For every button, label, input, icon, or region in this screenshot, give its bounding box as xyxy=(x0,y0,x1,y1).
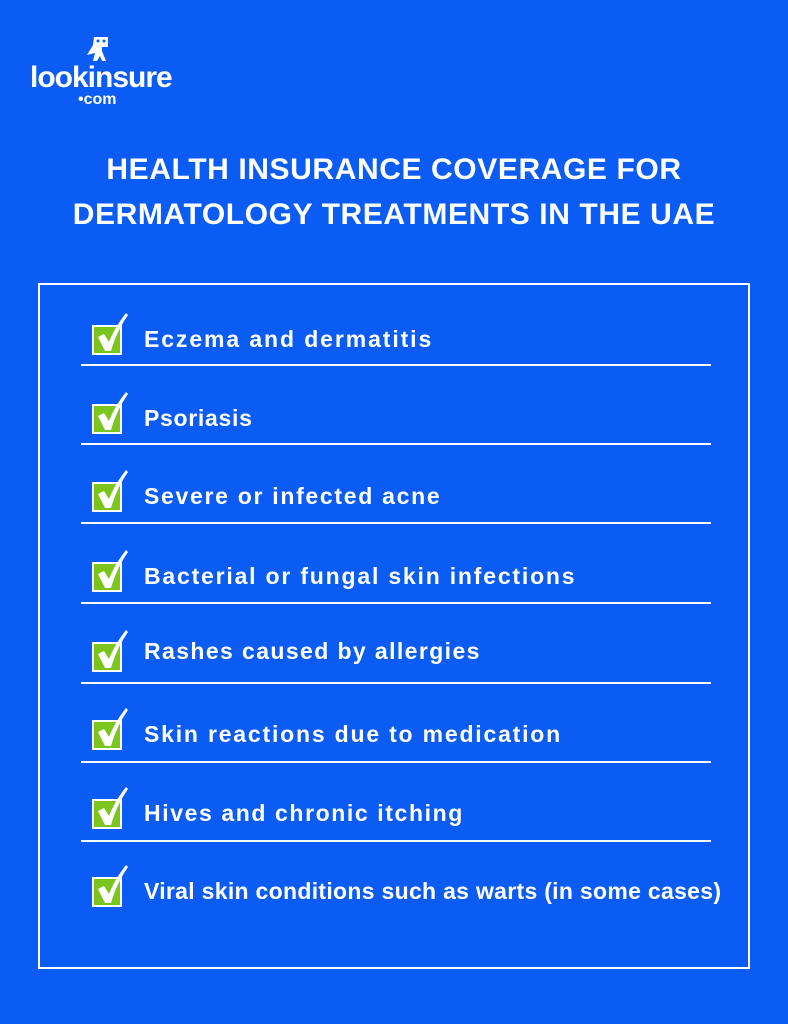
item 1 xyxy=(92,313,433,355)
item 1: Eczema and dermatitis xyxy=(144,326,433,352)
title: HEALTH INSURANCE COVERAGE FOR xyxy=(106,153,682,186)
icon: mascot xyxy=(87,37,108,61)
item 3 xyxy=(92,470,441,512)
item 7 xyxy=(92,787,464,829)
title: DERMATOLOGY TREATMENTS IN THE UAE xyxy=(73,198,715,231)
item 4 xyxy=(92,550,576,592)
item 5: Rashes caused by allergies xyxy=(144,638,481,664)
title xyxy=(73,153,715,231)
logo: lookinsure xyxy=(30,61,172,94)
item 5 xyxy=(92,630,481,672)
item 8: Viral skin conditions such as warts (in some cases) xyxy=(144,878,721,904)
item 3: Severe or infected acne xyxy=(144,483,441,509)
item 2: Psoriasis xyxy=(144,405,253,431)
panel: coverage list xyxy=(38,283,750,969)
item 4: Bacterial or fungal skin infections xyxy=(144,563,576,589)
item 6: Skin reactions due to medication xyxy=(144,721,562,747)
logo xyxy=(30,37,172,108)
item 6 xyxy=(92,708,562,750)
logo: •com xyxy=(78,91,116,108)
item 2 xyxy=(92,392,253,434)
item 8 xyxy=(92,865,721,907)
item 7: Hives and chronic itching xyxy=(144,800,464,826)
